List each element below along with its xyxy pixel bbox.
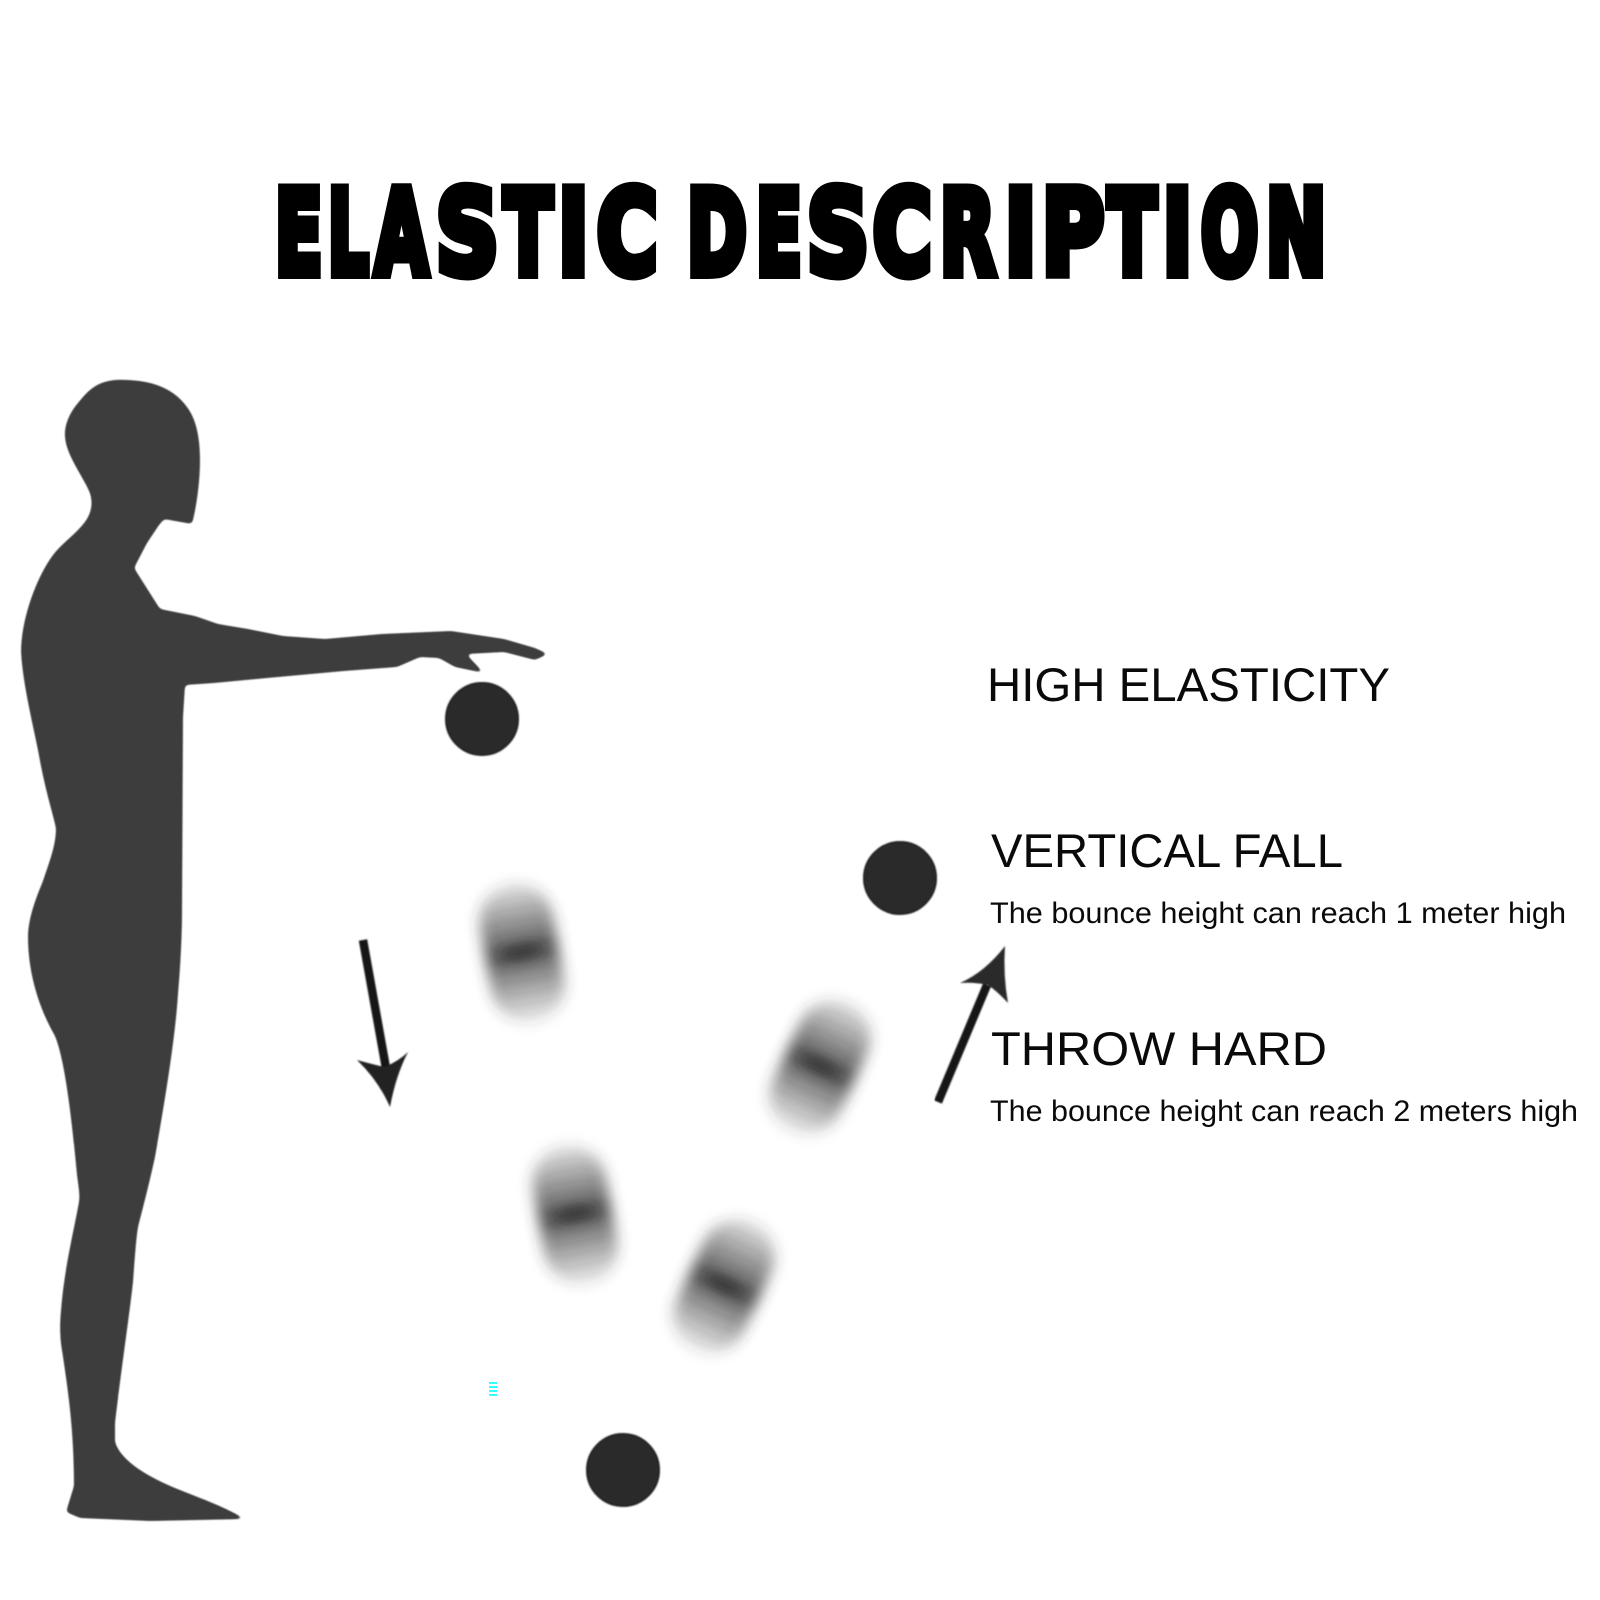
- title: O: [1201, 166, 1258, 302]
- text: vertical fall description: The bounce height can reach 1 meter high: [990, 897, 1566, 930]
- title: T: [1108, 166, 1156, 302]
- motion-blurred ball: falling, upper: [473, 878, 571, 1028]
- heading: high elasticity: HIGH ELASTICITY: [987, 658, 1390, 711]
- motion-blurred ball: rising, lower: [661, 1207, 787, 1365]
- ball: on the ground: [587, 1434, 659, 1506]
- motion-blurred ball: falling, lower: [526, 1140, 624, 1290]
- title: T: [504, 166, 552, 302]
- title: I: [1005, 166, 1036, 302]
- title: E: [275, 166, 322, 302]
- title: S: [436, 166, 499, 302]
- title: S: [807, 166, 869, 302]
- heading: throw hard: THROW HARD: [991, 1022, 1327, 1075]
- title: I: [558, 166, 588, 302]
- heading: vertical fall: VERTICAL FALL: [991, 824, 1343, 877]
- ball: top of the bounce: [864, 842, 936, 914]
- title: R: [940, 166, 995, 302]
- title: E: [756, 166, 802, 302]
- title: D: [687, 166, 747, 302]
- title: P: [1042, 166, 1104, 302]
- icon: standing person silhouette: [21, 380, 548, 1521]
- title: C: [597, 166, 657, 302]
- text: throw hard description: The bounce height can reach 2 meters high: [990, 1095, 1578, 1128]
- title: I: [1163, 166, 1192, 302]
- title: A: [375, 166, 428, 302]
- motion-blurred ball: rising, upper: [757, 988, 883, 1146]
- title: L: [328, 166, 369, 302]
- ball: held under the hand: [446, 683, 518, 755]
- cyan artifact mark: [489, 1382, 497, 1396]
- title: N: [1266, 166, 1326, 302]
- arrow: upward bounce: [938, 946, 1008, 1102]
- title: C: [873, 166, 932, 302]
- arrow: downward fall: [357, 940, 408, 1107]
